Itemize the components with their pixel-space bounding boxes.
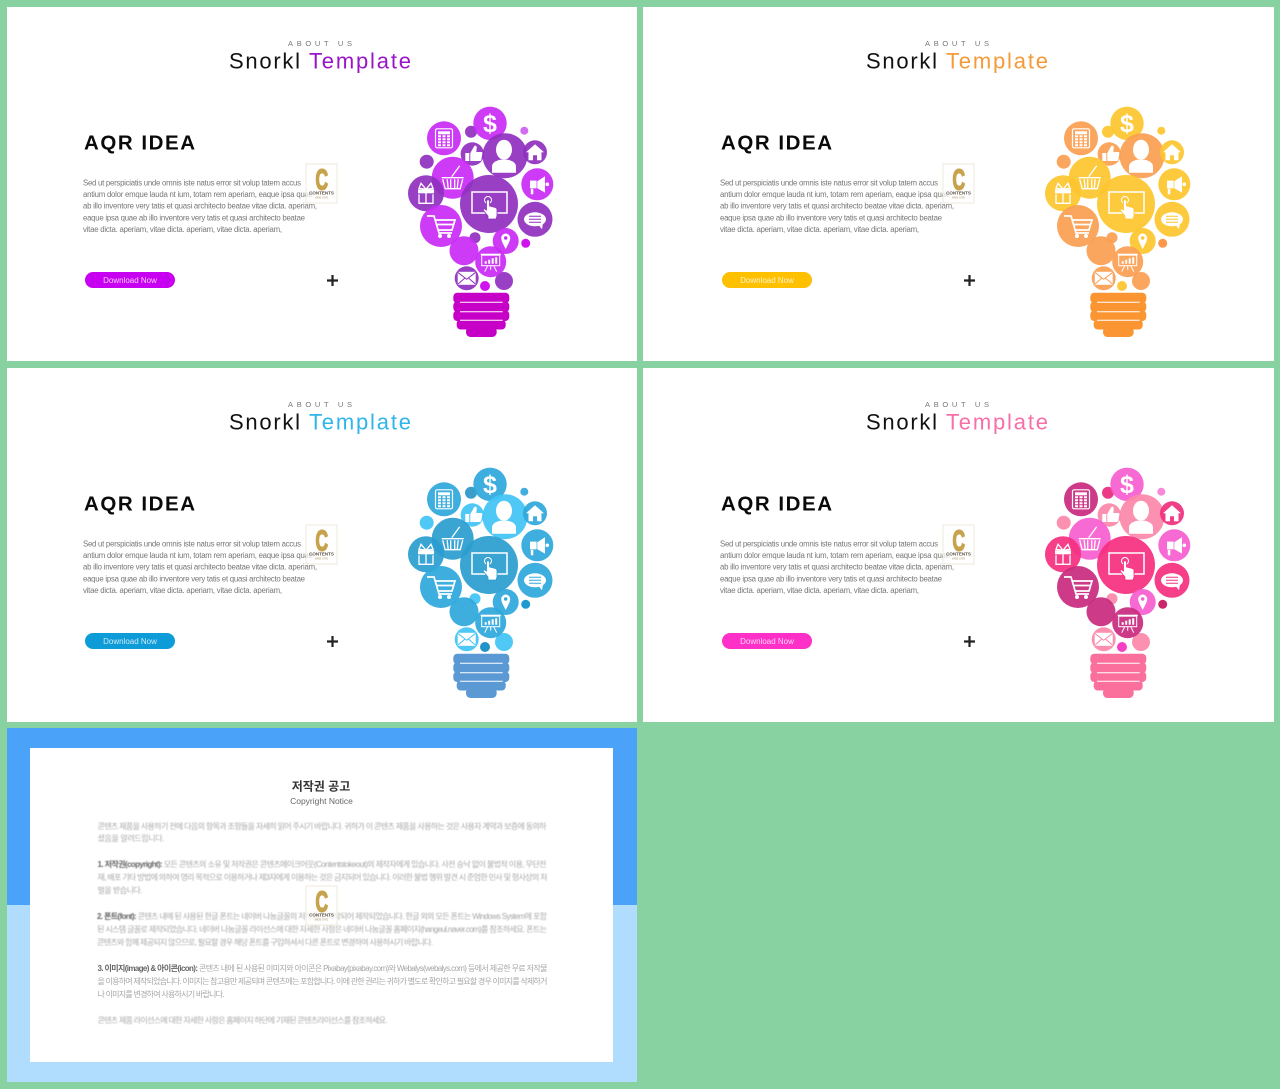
copyright title: 저작권 공고: [292, 778, 350, 794]
copyright section 1: 벌을 받습니다.: [98, 885, 142, 895]
icon: calculator: [1064, 482, 1098, 516]
icon: presentation: [475, 607, 506, 638]
panel: pink slide: [643, 368, 1274, 722]
button: Download Now: [740, 637, 794, 646]
icon: presentation: [475, 246, 506, 277]
title: Snorkl: [229, 48, 300, 74]
bulb base: [453, 654, 509, 698]
body text: Sed ut perspiciatis unde omnis iste natus error sit volup tatem accus: [83, 540, 301, 548]
icon: dollar: [1110, 107, 1144, 140]
copyright section 2: 콘텐츠와 함께 제공되지 않으므로, 필요할 경우 해당 폰트를 구입하셔서 다른 폰트로 변경하여 사용하시기 바랍니다.: [97, 937, 433, 947]
body text: eaque ipsa quae ab illo inventore very tatis et quasi architecto beatae: [83, 214, 305, 222]
icon: touch screen: [1097, 175, 1155, 233]
icon: speech bubble: [518, 563, 552, 598]
body text: eaque ipsa quae ab illo inventore very tatis et quasi architecto beatae: [83, 574, 305, 584]
icon: person: [482, 494, 528, 539]
copyright section 3: [98, 963, 548, 999]
copyright intro: [98, 821, 547, 843]
icon: calculator: [1064, 121, 1098, 155]
title: Snorkl: [866, 48, 937, 74]
body text: Sed ut perspiciatis unde omnis iste natus error sit volup tatem accus: [83, 178, 301, 188]
icon: plus: [327, 275, 338, 286]
icon: plus: [964, 275, 975, 286]
copyright section 2: 된 시스템 글꼴로 제작되었습니다. 네이버 나눔글꼴 라이선스에 대한 자세한 사항은 네이버 나눔글꼴 홈페이지(hangeul.naver.com)를 참조하세요. 폰트는: [97, 924, 547, 934]
icon: map pin: [1130, 589, 1156, 615]
icon: home: [1160, 501, 1184, 525]
body text: Sed ut perspiciatis unde omnis iste natus error sit volup tatem accus: [720, 540, 938, 548]
icon: speech bubble: [518, 202, 552, 237]
icon: map pin: [493, 589, 519, 615]
title: Template: [309, 410, 411, 434]
icon: touch screen: [460, 175, 518, 233]
body text: vitae dicta. aperiam, vitae dicta. aperiam, vitae dicta. aperiam,: [720, 586, 919, 595]
title: Template: [946, 410, 1048, 434]
icon: person: [1120, 494, 1164, 539]
button: [722, 272, 812, 288]
body text: ab illo inventore very tatis et quasi architecto beatae vitae dicta. aperiam,: [83, 202, 317, 210]
bulb base: [1090, 654, 1146, 698]
icon: basket: [1069, 518, 1111, 560]
eyebrow: about us: ABOUT US: [925, 400, 989, 409]
icon: map pin: [493, 228, 519, 254]
icon: thumbs up: [1098, 503, 1121, 527]
body text: antium dolor emque lauda nt ium, totam rem aperiam, eaque ipsa quae: [720, 551, 950, 560]
body text: vitae dicta. aperiam, vitae dicta. aperiam, vitae dicta. aperiam,: [83, 225, 282, 234]
copyright section 1: 재, 배포 기타 방법에 의하여 영리 목적으로 이용하거나 제3자에게 이용하는 것은 금지되어 있습니다. 이러한 불법 행위 발견 시 준엄한 민사 및 형사상의 처: [98, 872, 548, 882]
panel: purple slide: [7, 7, 637, 361]
copyright closing line: 콘텐츠 제품 라이선스에 대한 자세한 사항은 홈페이지 하단에 기재된 콘텐츠라이선스를 참조하세요.: [98, 1015, 388, 1025]
panel: copyright notice: [7, 728, 637, 1082]
copyright intro: 셨음을 알려드립니다.: [98, 833, 164, 843]
icon: gift: [408, 536, 444, 572]
icon: gift: [1045, 175, 1081, 211]
logo stamp: [306, 886, 337, 925]
icon: dollar: [1110, 468, 1144, 501]
button: Download Now: [103, 276, 157, 285]
icon: megaphone: [521, 529, 553, 561]
button: [722, 633, 812, 649]
chart: light bulb of icons: [408, 107, 553, 337]
body text: [720, 540, 954, 595]
icon: touch screen: [1097, 536, 1155, 594]
copyright intro: 콘텐츠 제품을 사용하기 전에 다음의 항목과 조항들을 자세히 읽어 주시기 바랍니다. 귀하가 이 콘텐츠 제품을 사용하는 것은 사용자 계약과 보증에 동의하: [98, 821, 547, 831]
icon: dollar: [473, 107, 507, 140]
icon: mail: [1092, 266, 1116, 290]
icon: megaphone: [1158, 168, 1190, 200]
copyright section 3: 을 이용하여 제작되었습니다. 이미지는 참고용만 제공되며 콘텐츠에는 포함합니다. 이에 관한 권리는 귀하가 별도로 확인하고 필요할 경우 이미지를 삭제하거: [98, 976, 547, 986]
icon: plus: [327, 636, 338, 647]
body text: antium dolor emque lauda nt ium, totam rem aperiam, eaque ipsa quae: [83, 551, 313, 560]
eyebrow: about us: ABOUT US: [288, 39, 352, 48]
body text: antium dolor emque lauda nt ium, totam rem aperiam, eaque ipsa quae: [720, 190, 950, 199]
bulb base: [453, 293, 509, 337]
icon: gift: [408, 175, 444, 211]
icon: touch screen: [460, 536, 518, 594]
icon: dollar: [473, 468, 507, 501]
icon: cart: [420, 566, 462, 608]
heading: AQR IDEA: [721, 132, 832, 154]
body text: [83, 540, 317, 595]
icon: home: [1160, 140, 1184, 164]
icon: thumbs up: [461, 503, 484, 527]
icon: cart: [420, 205, 462, 247]
icon: megaphone: [1158, 529, 1190, 561]
heading: AQR IDEA: [721, 492, 832, 516]
icon: cart: [1057, 566, 1099, 608]
icon: mail: [1092, 627, 1116, 651]
body text: [720, 178, 954, 234]
icon: basket: [432, 518, 474, 560]
body text: ab illo inventore very tatis et quasi architecto beatae vitae dicta. aperiam,: [720, 562, 954, 572]
icon: person: [1120, 133, 1164, 178]
copyright section 3: 3. 이미지(image) & 아이콘(icon): 콘텐츠 내에 된 사용된 이미지와 아이콘은 Pixabay(pixabay.com)와 Webalys(webalys.com) 등에서 제공한 무료 저작물: [98, 963, 548, 973]
icon: thumbs up: [1098, 142, 1121, 166]
icon: megaphone: [521, 168, 553, 200]
body text: eaque ipsa quae ab illo inventore very tatis et quasi architecto beatae: [720, 574, 942, 584]
icon: home: [523, 140, 547, 164]
body text: [83, 178, 317, 234]
logo stamp: [306, 164, 337, 203]
body text: vitae dicta. aperiam, vitae dicta. aperiam, vitae dicta. aperiam,: [83, 586, 282, 595]
copyright section 2: [97, 911, 548, 947]
eyebrow: about us: ABOUT US: [925, 39, 989, 48]
button: [85, 272, 175, 288]
icon: speech bubble: [1154, 202, 1190, 237]
icon: calculator: [427, 121, 461, 155]
icon: map pin: [1130, 228, 1156, 254]
copyright section 3: 나 이미지를 변경하여 사용하시기 바랍니다.: [98, 989, 224, 999]
icon: gift: [1045, 536, 1081, 572]
icon: basket: [432, 157, 474, 199]
chart: light bulb of icons: [408, 468, 553, 698]
body text: Sed ut perspiciatis unde omnis iste natus error sit volup tatem accus: [720, 178, 938, 188]
title: Snorkl: [866, 410, 937, 434]
logo stamp: [943, 164, 974, 203]
button: Download Now: [103, 637, 157, 646]
icon: thumbs up: [461, 142, 484, 166]
copyright section 1: 1. 저작권(copyright): 모든 콘텐츠의 소유 및 저작권은 콘텐츠메이크어웃(Contentstokeout)의 제작자에게 있습니다. 사전 승낙 없이 불법적 이용, 무단전: [98, 859, 546, 869]
panel: orange slide: [643, 7, 1274, 361]
icon: person: [482, 133, 528, 178]
icon: speech bubble: [1154, 563, 1190, 598]
heading: AQR IDEA: [84, 132, 195, 154]
heading: AQR IDEA: [84, 492, 195, 516]
copyright section 1: [98, 859, 548, 895]
icon: calculator: [427, 482, 461, 516]
panel: blue slide: [7, 368, 637, 722]
body text: eaque ipsa quae ab illo inventore very tatis et quasi architecto beatae: [720, 214, 942, 222]
body text: ab illo inventore very tatis et quasi architecto beatae vitae dicta. aperiam,: [83, 562, 317, 572]
button: Download Now: [740, 276, 794, 285]
body text: antium dolor emque lauda nt ium, totam rem aperiam, eaque ipsa quae: [83, 190, 313, 199]
icon: plus: [964, 636, 975, 647]
icon: mail: [455, 266, 479, 290]
button: [85, 633, 175, 649]
body text: vitae dicta. aperiam, vitae dicta. aperiam, vitae dicta. aperiam,: [720, 225, 919, 234]
icon: basket: [1069, 157, 1111, 199]
icon: home: [523, 501, 547, 525]
title: Snorkl: [229, 410, 300, 434]
icon: presentation: [1112, 246, 1143, 277]
icon: cart: [1057, 205, 1099, 247]
logo stamp: [306, 525, 337, 564]
title: Template: [309, 48, 411, 74]
body text: ab illo inventore very tatis et quasi architecto beatae vitae dicta. aperiam,: [720, 202, 954, 210]
eyebrow: about us: ABOUT US: [288, 400, 352, 409]
copyright section 2: 2. 폰트(font): 콘텐츠 내에 된 사용된 한글 폰트는 네이버 나눔글꼴의 저작물로 제작되어 제작되었습니다. 한글 외의 모든 폰트는 Windows System에 포함: [97, 911, 548, 921]
icon: presentation: [1112, 607, 1143, 638]
chart: light bulb of icons: [1045, 107, 1190, 337]
chart: light bulb of icons: [1045, 468, 1190, 698]
icon: mail: [455, 627, 479, 651]
logo stamp: [943, 525, 974, 564]
bulb base: [1090, 293, 1146, 337]
title: Template: [946, 48, 1048, 74]
copyright subtitle: Copyright Notice: [290, 796, 353, 806]
